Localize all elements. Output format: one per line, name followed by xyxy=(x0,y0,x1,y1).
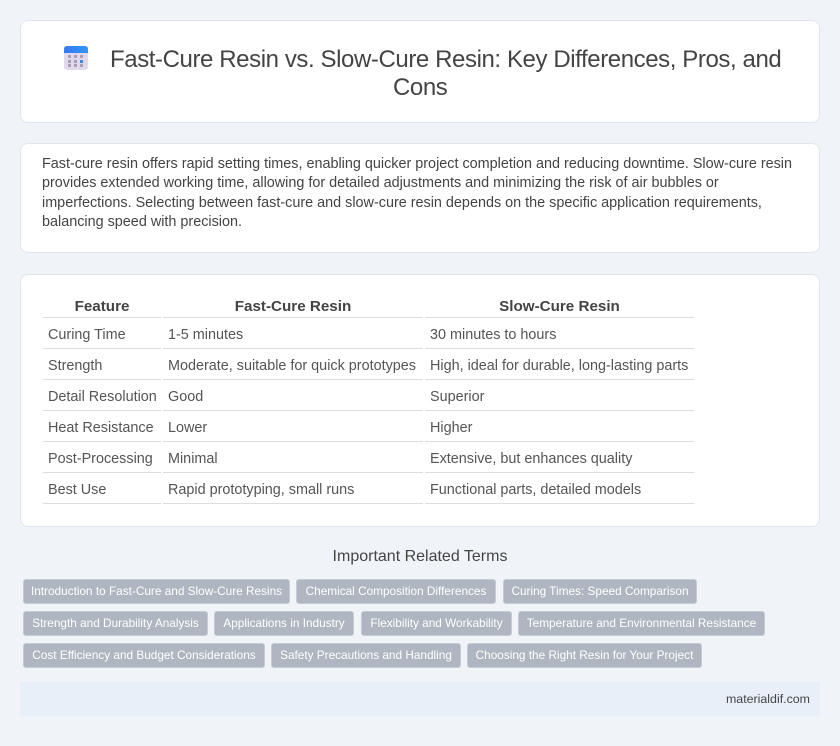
tag: Curing Times: Speed Comparison xyxy=(511,584,689,598)
comparison table: Moderate, suitable for quick prototypes xyxy=(168,358,416,374)
tag: Introduction to Fast-Cure and Slow-Cure Resins xyxy=(31,584,282,598)
intro text: provides extended working time, allowing for detailed adjustments and minimizing the risk of air bubbles or xyxy=(42,175,719,191)
comparison table: Good xyxy=(168,389,203,405)
comparison table xyxy=(43,298,694,504)
tag: Applications in Industry xyxy=(223,616,345,630)
tag xyxy=(503,579,697,604)
title xyxy=(110,46,781,101)
tag: Safety Precautions and Handling xyxy=(280,648,452,662)
row: Detail Resolution: Detail Resolution xyxy=(48,389,157,405)
intro text: Fast-cure resin offers rapid setting times, enabling quicker project completion and reducing downtime. Slow-cure resin xyxy=(42,156,792,172)
row: Heat Resistance: Heat Resistance xyxy=(48,420,154,436)
row: Post-Processing: Post-Processing xyxy=(48,451,153,467)
tag xyxy=(467,643,702,668)
intro text xyxy=(42,156,792,230)
tag xyxy=(23,643,265,668)
header panel xyxy=(20,20,820,123)
tag xyxy=(271,643,461,668)
comparison table panel xyxy=(20,274,820,527)
intro text: balancing speed with precision. xyxy=(42,214,242,230)
comparison table: Extensive, but enhances quality xyxy=(430,451,632,467)
tag xyxy=(361,611,512,636)
row: Strength: Strength xyxy=(48,358,102,374)
row: Best Use: Best Use xyxy=(48,482,106,498)
tag: Chemical Composition Differences xyxy=(306,584,486,598)
comparison table: 30 minutes to hours xyxy=(430,327,556,343)
title: Cons xyxy=(393,74,447,101)
tag: Cost Efficiency and Budget Considerations xyxy=(32,648,256,662)
tag xyxy=(214,611,354,636)
comparison table: Rapid prototyping, small runs xyxy=(168,482,354,498)
footer source: materialdif.com xyxy=(726,692,810,706)
comparison table: Superior xyxy=(430,389,484,405)
related terms tags xyxy=(23,579,765,668)
tag: Temperature and Environmental Resistance xyxy=(527,616,756,630)
comparison table: Minimal xyxy=(168,451,218,467)
icon: calendar xyxy=(64,46,88,70)
comparison table: Higher xyxy=(430,420,472,436)
intro panel xyxy=(20,143,820,253)
comparison table: Functional parts, detailed models xyxy=(430,482,641,498)
comparison table: 1-5 minutes xyxy=(168,327,243,343)
intro text: imperfections. Selecting between fast-cure and slow-cure resin depends on the specific application requirements, xyxy=(42,195,762,211)
column header: Feature: Feature xyxy=(75,298,129,315)
row: Curing Time: Curing Time xyxy=(48,327,126,343)
tag xyxy=(23,579,290,604)
tag xyxy=(296,579,496,604)
footer bar xyxy=(20,682,820,716)
related terms heading: Important Related Terms xyxy=(333,548,507,565)
tag: Choosing the Right Resin for Your Project xyxy=(476,648,693,662)
column header: Fast-Cure Resin: Fast-Cure Resin xyxy=(235,298,351,315)
tag: Flexibility and Workability xyxy=(370,616,503,630)
column header: Slow-Cure Resin: Slow-Cure Resin xyxy=(499,298,620,315)
tag xyxy=(23,611,208,636)
tag xyxy=(518,611,765,636)
comparison table: High, ideal for durable, long-lasting parts xyxy=(430,358,688,374)
title: Fast-Cure Resin vs. Slow-Cure Resin: Key Differences, Pros, and xyxy=(110,46,781,73)
tag: Strength and Durability Analysis xyxy=(32,616,199,630)
comparison table: Lower xyxy=(168,420,207,436)
